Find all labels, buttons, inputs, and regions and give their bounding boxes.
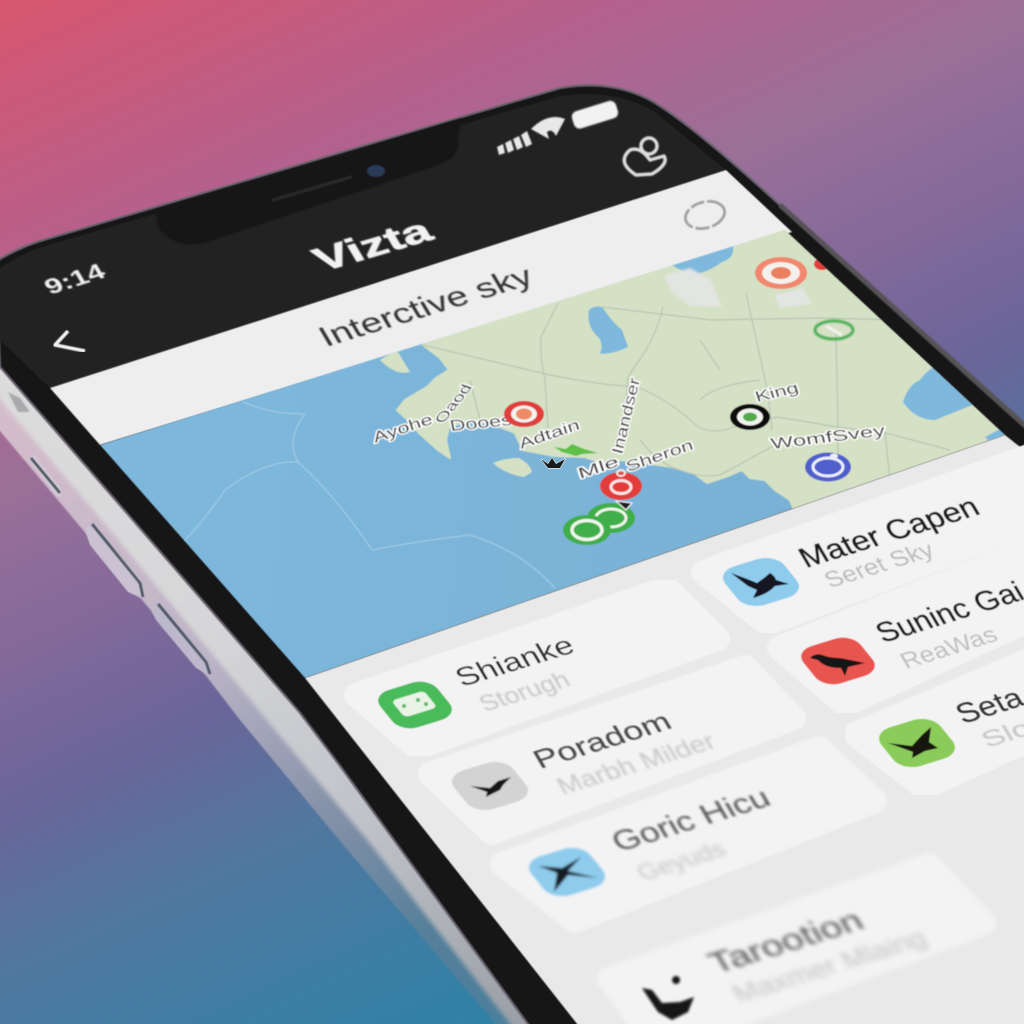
subheader title: Interctive sky	[313, 261, 539, 353]
name: Suninc Gai	[870, 576, 1024, 649]
subtitle: Geyuds	[632, 837, 731, 886]
status icon: signal	[497, 131, 532, 155]
name: Tarootion	[701, 903, 869, 980]
map labels: Mle	[576, 454, 621, 483]
card: Mater Capen	[703, 452, 1024, 624]
subtitle: Storugh	[474, 667, 575, 717]
header bar: dark status area	[0, 94, 726, 388]
name: Goric Hicu	[606, 782, 776, 858]
urban grey zone east	[775, 288, 812, 308]
map labels: Ayohe	[371, 411, 435, 447]
icon: grey bird	[445, 758, 535, 814]
name: Seta	[950, 682, 1024, 730]
icon: red bird	[794, 634, 882, 688]
map labels: Adtain	[517, 417, 582, 453]
side buttons	[29, 456, 212, 675]
bird marker on map	[541, 458, 565, 468]
icon: notification bell	[624, 138, 665, 175]
pin: red west	[504, 401, 544, 427]
icon: blue bird	[716, 554, 806, 610]
pin: green pair front	[563, 515, 611, 545]
card: Tarootion	[609, 865, 984, 1024]
card: Poradom	[430, 667, 794, 833]
subtitle: Marbh Milder	[552, 729, 721, 800]
card: Suninc Gai	[779, 545, 1024, 705]
icon: refresh	[682, 197, 728, 233]
marker tail below red pin	[616, 501, 632, 510]
right sea	[902, 368, 972, 420]
pin: red central	[600, 470, 642, 500]
pin: orange	[755, 257, 807, 289]
icon: back chevron	[55, 331, 85, 351]
status: time: 9:14	[39, 259, 110, 299]
pin: black	[730, 404, 770, 430]
pin: green small	[815, 321, 853, 339]
icon: green bird	[872, 715, 962, 771]
pin: red top edge	[814, 259, 827, 270]
map labels: King	[753, 380, 801, 406]
right rim highlight	[780, 205, 1024, 434]
notch	[155, 118, 462, 245]
subtitle: ReaWas	[895, 622, 1003, 674]
name: Mater Capen	[793, 491, 985, 574]
app title: Vizta	[306, 211, 441, 279]
map labels: WomfSvey	[769, 423, 887, 453]
name: Poradom	[527, 706, 677, 774]
card: Goric Hicu	[502, 748, 875, 921]
land masses	[397, 225, 1010, 510]
land roads	[423, 293, 950, 480]
map labels: Inandser	[610, 375, 644, 456]
list panel	[305, 435, 1024, 1024]
map labels: Dooes	[448, 412, 514, 435]
status icon: wifi	[531, 117, 565, 139]
subtitle: Seret Sky	[819, 537, 939, 593]
pin: blue	[805, 452, 851, 482]
map labels	[371, 375, 887, 483]
icon: black duck	[642, 976, 694, 1020]
small northern coast island	[380, 352, 410, 373]
sea borders	[183, 402, 555, 588]
name: Shianke	[449, 630, 580, 692]
camera	[367, 165, 385, 177]
status icon: battery	[570, 99, 620, 130]
top bay	[672, 246, 733, 274]
island	[493, 458, 532, 477]
green park strip	[554, 444, 598, 456]
phone side: silver frame	[0, 360, 575, 1024]
sea	[100, 340, 793, 678]
subheader bar	[50, 170, 792, 445]
urban grey zones	[664, 268, 722, 307]
card: Seta	[855, 655, 1024, 788]
card: Shianke	[356, 588, 718, 748]
lake	[588, 306, 628, 354]
icon: green message	[371, 678, 459, 732]
small coastal inlet	[985, 429, 1004, 440]
pin: green pair back	[587, 503, 635, 533]
map panel	[100, 225, 1010, 678]
speaker slit	[273, 177, 351, 200]
map labels: Sheron	[624, 437, 695, 476]
icon: blue swallow	[522, 844, 612, 900]
subtitle: Maxmer Mlaing	[728, 925, 932, 1008]
map labels: Oaod	[431, 382, 476, 425]
